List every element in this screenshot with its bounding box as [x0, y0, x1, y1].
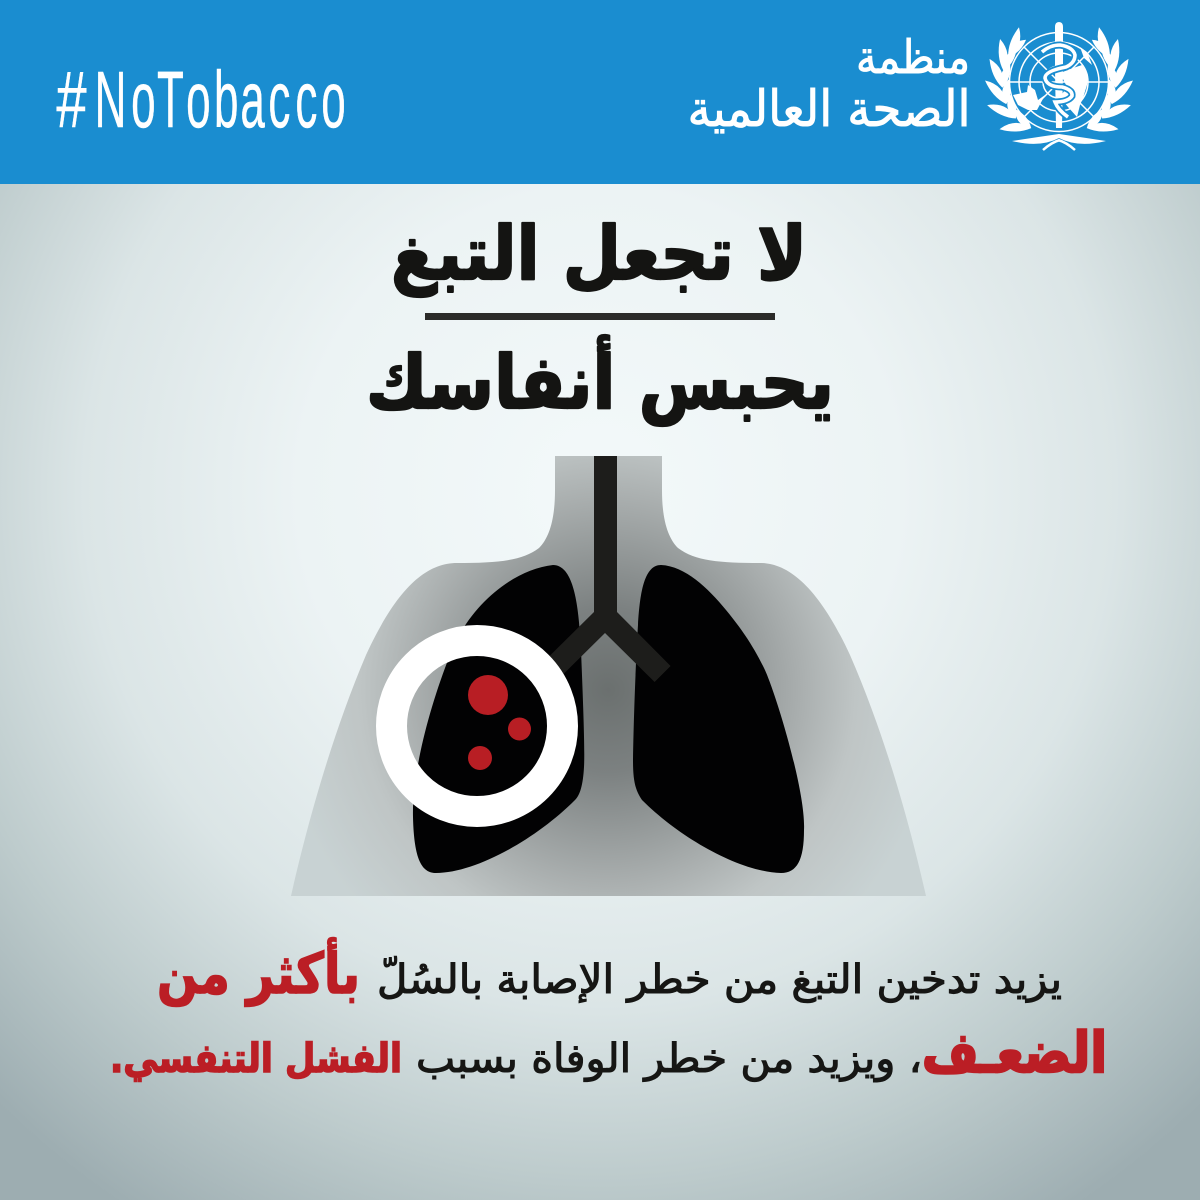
- organisation name: [688, 30, 970, 138]
- magnifier ring: [392, 640, 562, 812]
- trachea and bronchi: [539, 456, 671, 682]
- emphasis: respiratory failure: الفشل التنفسي.: [110, 1036, 402, 1082]
- hashtag: #: [56, 56, 87, 145]
- organisation name: الصحة العالمية: [688, 80, 970, 138]
- organisation name: منظمة: [856, 30, 970, 84]
- header bar: [0, 0, 1200, 184]
- icon: WHO emblem: [983, 22, 1135, 150]
- heading divider: [425, 313, 775, 320]
- left lung: [413, 565, 584, 873]
- illustration: lungs: [291, 456, 926, 896]
- right lung: [633, 565, 804, 873]
- heading line 2: يحبس أنفاسك: [366, 334, 834, 426]
- hashtag: NoTobacco: [95, 55, 346, 144]
- tuberculosis spots: [468, 675, 531, 770]
- body text: [110, 937, 1107, 1086]
- torso silhouette: [291, 456, 926, 896]
- heading line 1: لا تجعل التبغ: [391, 211, 807, 297]
- emphasis: double: الضعـف: [922, 1021, 1107, 1086]
- emphasis: more than: بأكثر من: [157, 937, 360, 1007]
- body line 1: يزيد تدخين التبغ من خطر الإصابة بالسُلّ: [377, 956, 1062, 1003]
- body line 2: ، ويزيد من خطر الوفاة بسبب: [416, 1036, 922, 1082]
